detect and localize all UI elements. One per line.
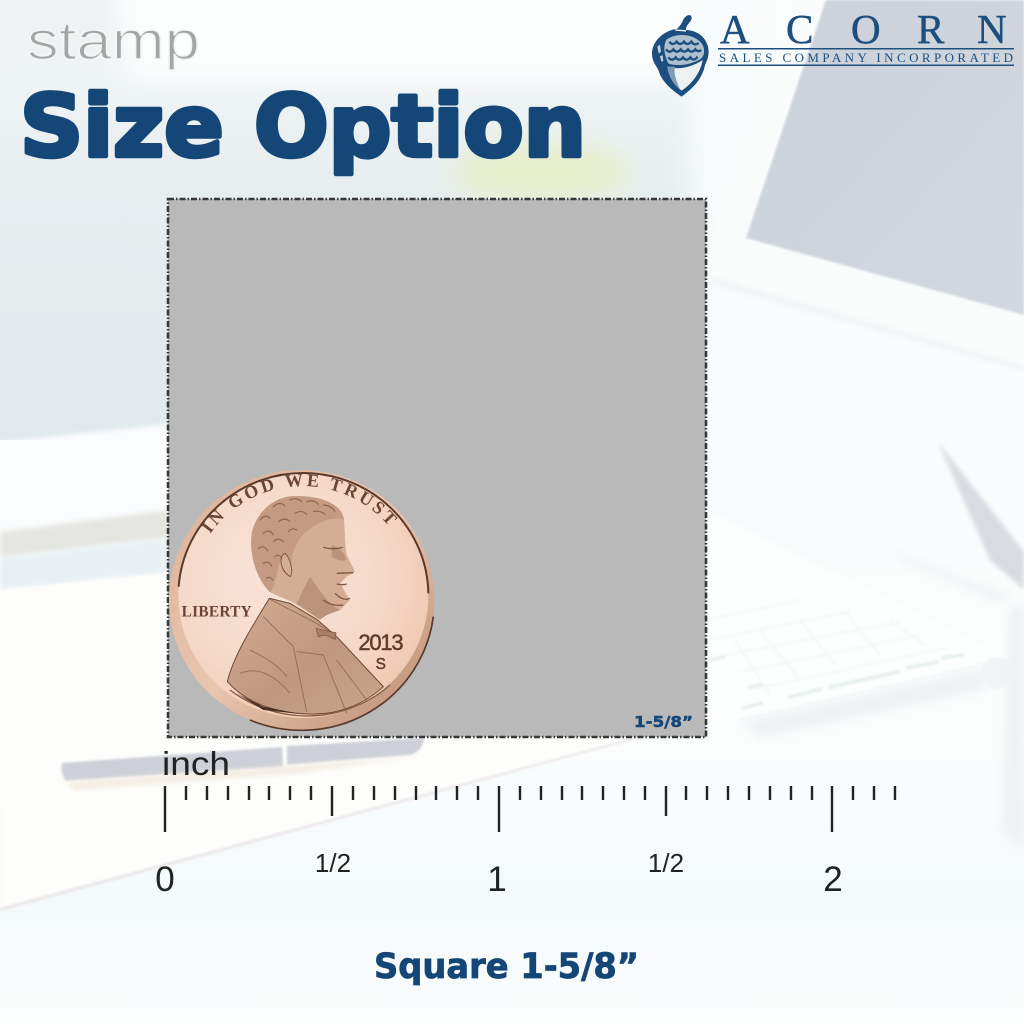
pen	[62, 747, 283, 781]
ruler numbers: 2	[823, 860, 843, 899]
logo tagline: SALES COMPANY INCORPORATED	[719, 50, 1013, 65]
keyboard	[740, 668, 985, 738]
ruler ticks	[165, 786, 895, 832]
coin date: 2013: 2013	[358, 630, 404, 655]
paper edge	[0, 736, 640, 911]
pencils and cup	[938, 442, 1024, 590]
coin mint mark: S: S	[376, 656, 386, 673]
coin inscription: Liberty: LIBERTY	[182, 604, 252, 621]
ruler numbers: 1/2	[648, 848, 684, 878]
small heading: stamp: stamp	[27, 11, 200, 71]
main heading: Size Option: Size Option	[20, 77, 586, 177]
coin inscription: In God We Trust	[210, 486, 395, 534]
ruler numbers: 0	[155, 860, 175, 899]
penny for scale: IN GOD WE TRUST	[201, 474, 398, 534]
ruler numbers	[155, 848, 843, 899]
left shelf	[0, 424, 170, 532]
logo wordmark: ACORN: ACORN	[720, 6, 1007, 52]
caption: Square 1-5/8: Square 1-5/8”	[374, 947, 639, 987]
ruler numbers: 1	[487, 860, 507, 899]
penny for scale	[169, 470, 434, 732]
portrait hair	[251, 496, 344, 593]
icon: acorn	[652, 15, 709, 97]
portrait ear	[281, 553, 292, 577]
monitor	[700, 0, 1024, 372]
portrait bow tie	[316, 628, 336, 639]
stamp size square: 1-5/8 inch	[168, 199, 706, 737]
portrait head	[271, 515, 355, 620]
dimension label: 1-5/8”	[634, 713, 693, 731]
ruler numbers: 1/2	[315, 848, 351, 878]
logo: Acorn Sales Company Incorporated	[652, 6, 1014, 97]
ruler	[155, 745, 895, 899]
ruler unit label: inch: inch	[162, 745, 230, 782]
portrait bust	[227, 598, 383, 714]
